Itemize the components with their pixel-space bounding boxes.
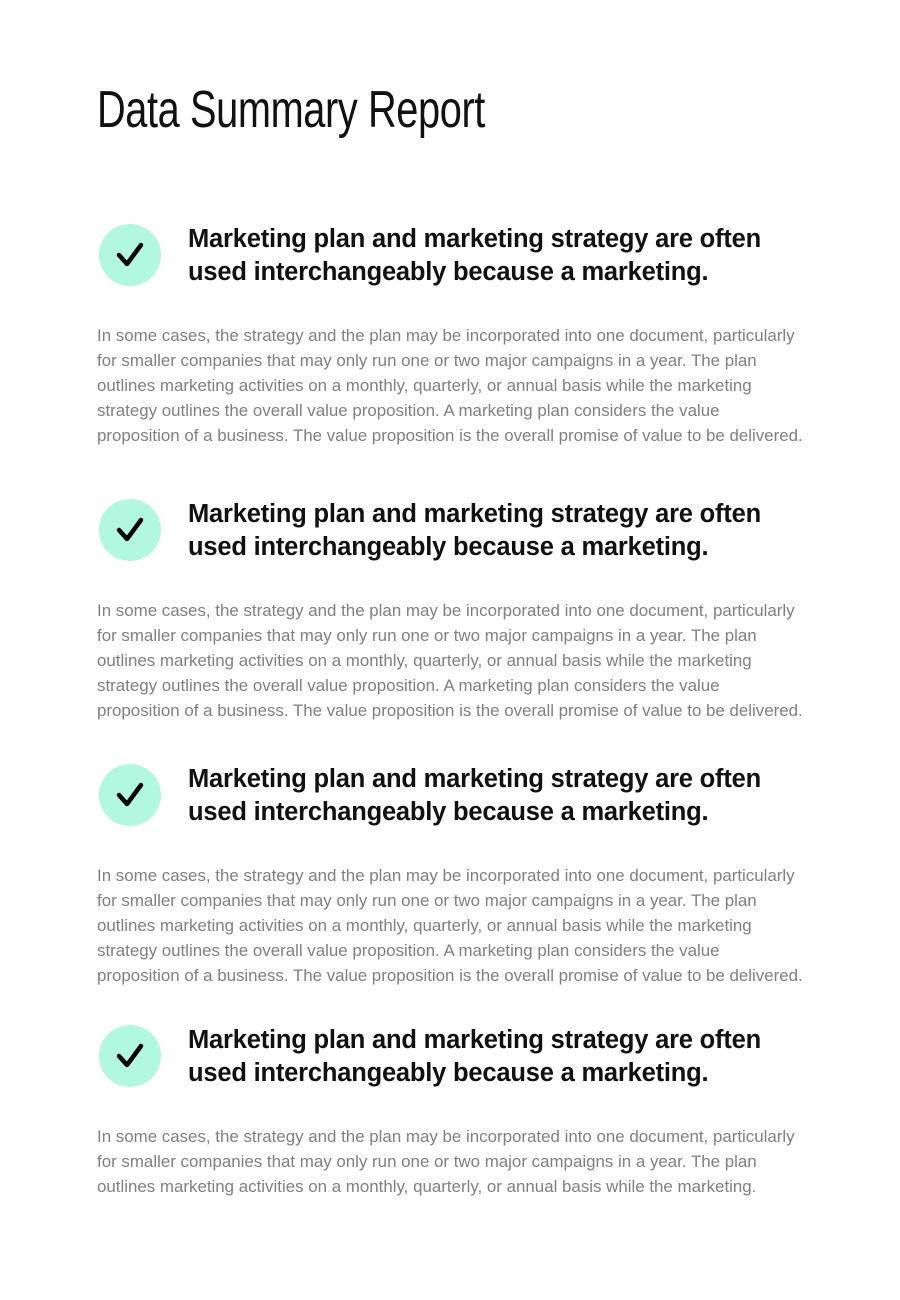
text 3: strategy outlines the overall value proposition. A marketing plan considers the value xyxy=(97,941,720,960)
text 1: for smaller companies that may only run one or two major campaigns in a year. The plan xyxy=(97,351,757,370)
text 3 xyxy=(97,866,803,985)
panel: section 4 xyxy=(97,1025,795,1196)
icon: check 3 xyxy=(99,764,161,826)
text 2: proposition of a business. The value proposition is the overall promise of value to be delivered. xyxy=(97,701,803,720)
text 3: for smaller companies that may only run one or two major campaigns in a year. The plan xyxy=(97,891,757,910)
icon: check 2 xyxy=(99,499,161,561)
text 2: In some cases, the strategy and the plan may be incorporated into one document, particularly xyxy=(97,601,795,620)
icon: check 4 xyxy=(99,1025,161,1087)
panel: section 3 xyxy=(97,764,803,985)
heading 4: Marketing plan and marketing strategy are often xyxy=(188,1026,761,1054)
panel: section 2 xyxy=(97,499,803,720)
heading 2 xyxy=(188,500,761,561)
heading 2: Marketing plan and marketing strategy are often xyxy=(188,500,761,528)
heading 4: used interchangeably because a marketing. xyxy=(188,1059,708,1087)
heading 3 xyxy=(188,765,761,826)
text 2: for smaller companies that may only run one or two major campaigns in a year. The plan xyxy=(97,626,757,645)
text 1 xyxy=(97,326,803,445)
text 2: strategy outlines the overall value proposition. A marketing plan considers the value xyxy=(97,676,720,695)
heading 3: Marketing plan and marketing strategy are often xyxy=(188,765,761,793)
icon: check 1 xyxy=(99,224,161,286)
heading 1 xyxy=(188,225,761,286)
heading 1: used interchangeably because a marketing. xyxy=(188,258,708,286)
text 3: In some cases, the strategy and the plan may be incorporated into one document, particularly xyxy=(97,866,795,885)
heading 4 xyxy=(188,1026,761,1087)
heading 3: used interchangeably because a marketing. xyxy=(188,798,708,826)
text 2 xyxy=(97,601,803,720)
text 4: In some cases, the strategy and the plan may be incorporated into one document, particularly xyxy=(97,1127,795,1146)
text 3: outlines marketing activities on a monthly, quarterly, or annual basis while the marketing xyxy=(97,916,752,935)
text 4 xyxy=(97,1127,795,1196)
text 4: outlines marketing activities on a monthly, quarterly, or annual basis while the marketing. xyxy=(97,1177,756,1196)
text 1: In some cases, the strategy and the plan may be incorporated into one document, particularly xyxy=(97,326,795,345)
title: Data Summary Report xyxy=(97,81,485,139)
text 2: outlines marketing activities on a monthly, quarterly, or annual basis while the marketing xyxy=(97,651,752,670)
heading 1: Marketing plan and marketing strategy are often xyxy=(188,225,761,253)
text 1: strategy outlines the overall value proposition. A marketing plan considers the value xyxy=(97,401,720,420)
text 1: proposition of a business. The value proposition is the overall promise of value to be delivered. xyxy=(97,426,803,445)
text 4: for smaller companies that may only run one or two major campaigns in a year. The plan xyxy=(97,1152,757,1171)
text 3: proposition of a business. The value proposition is the overall promise of value to be delivered. xyxy=(97,966,803,985)
text 1: outlines marketing activities on a monthly, quarterly, or annual basis while the marketing xyxy=(97,376,752,395)
heading 2: used interchangeably because a marketing. xyxy=(188,533,708,561)
panel: section 1 xyxy=(97,224,803,445)
